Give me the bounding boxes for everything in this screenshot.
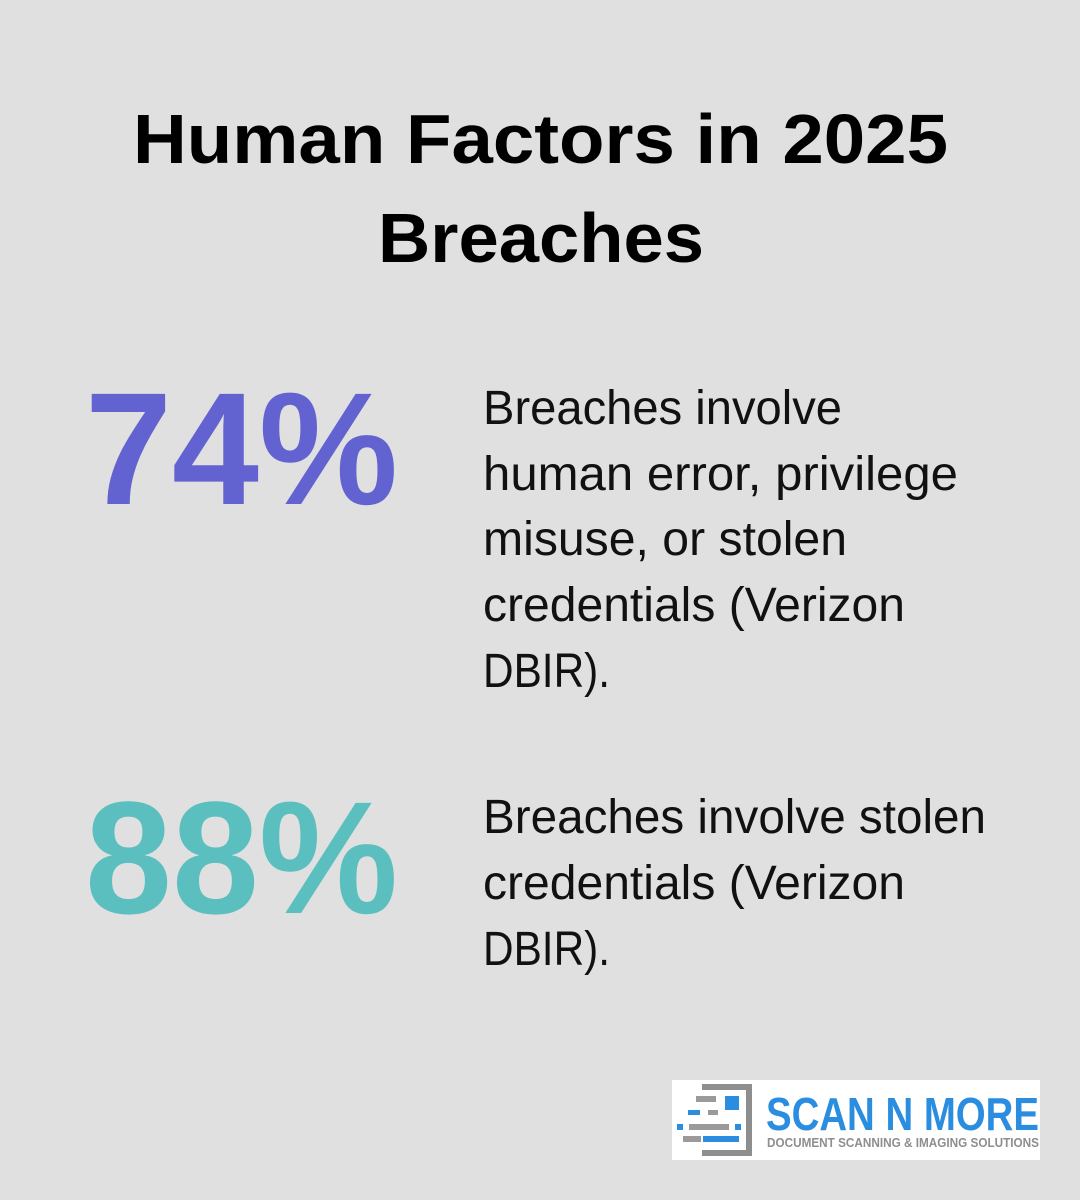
title	[133, 100, 948, 277]
icon: scan bracket	[677, 1084, 752, 1156]
stat: 88%	[85, 768, 986, 976]
text: 88% description: credentials (Verizon	[483, 857, 905, 910]
text: 88% description	[483, 791, 986, 976]
title: Human Factors in 2025	[133, 100, 948, 178]
logo: Scan N More: DOCUMENT SCANNING & IMAGING SOLUTIONS	[767, 1135, 1039, 1150]
number 74%: 74%	[85, 359, 398, 538]
text: 74% description	[483, 382, 958, 698]
text: 74% description: human error, privilege	[483, 448, 958, 501]
text: 74% description: credentials (Verizon	[483, 579, 905, 632]
text: 74% description: misuse, or stolen	[483, 513, 847, 566]
logo: Scan N More	[672, 1080, 1040, 1160]
stat: 74%	[85, 359, 958, 698]
text: 74% description: Breaches involve	[483, 382, 842, 435]
text: 88% description: Breaches involve stolen	[483, 791, 986, 844]
text: 88% description: DBIR).	[483, 923, 610, 976]
text: 74% description: DBIR).	[483, 645, 610, 698]
title: Breaches	[378, 199, 704, 277]
number 88%: 88%	[85, 768, 398, 947]
